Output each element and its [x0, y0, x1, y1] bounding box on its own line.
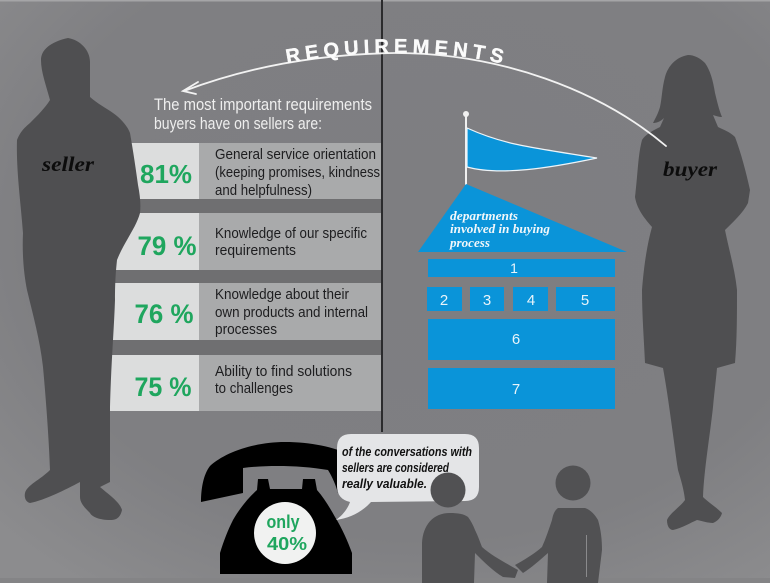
- row 4: 75 %: [134, 372, 192, 402]
- row 2: requirements: [215, 243, 296, 259]
- dial circle: only: [266, 512, 300, 532]
- seller silhouette: [17, 38, 140, 520]
- department 3: 3: [483, 292, 491, 309]
- department 2: 2: [440, 292, 448, 309]
- roof: departments: [450, 208, 518, 223]
- title: REQUIREMENTS: [286, 38, 504, 63]
- label: buyer: buyer: [663, 157, 718, 181]
- label: seller: seller: [41, 152, 95, 176]
- row 4: to challenges: [215, 381, 293, 397]
- department 1: [428, 259, 615, 277]
- department 4: [513, 287, 548, 311]
- row 4: Ability to find solutions: [215, 364, 352, 380]
- callout: sellers are considered: [342, 461, 449, 475]
- row 1: [100, 143, 381, 199]
- row 2: Knowledge of our specific: [215, 226, 367, 242]
- department 2: [427, 287, 462, 311]
- row 1: (keeping promises, kindness: [215, 165, 380, 181]
- department 1: 1: [510, 260, 518, 276]
- building: departments: [418, 184, 627, 409]
- roof: process: [449, 235, 490, 250]
- department 4: 4: [527, 292, 535, 309]
- intro text: The most important requirements: [154, 96, 372, 114]
- buyer silhouette: [635, 55, 750, 530]
- arrow: buyer to seller arc: [183, 53, 666, 146]
- callout: of the conversations with: [342, 445, 472, 459]
- department 6: 6: [512, 331, 520, 348]
- row 1: General service orientation: [215, 147, 376, 163]
- dial circle: 40%: [267, 534, 307, 554]
- department 5: [556, 287, 615, 311]
- department 3: [470, 287, 504, 311]
- callout: really valuable.: [342, 477, 427, 491]
- dial circle: [254, 502, 316, 564]
- roof: involved in buying: [450, 221, 550, 236]
- icon: two people shaking hands: [422, 466, 602, 583]
- intro text: buyers have on sellers are:: [154, 115, 322, 133]
- row 2: 79 %: [138, 231, 196, 261]
- row 1: and helpfulness): [215, 183, 312, 199]
- row 3: [100, 283, 381, 340]
- roof: [418, 184, 627, 252]
- row 3: processes: [215, 322, 277, 338]
- callout: [336, 434, 479, 520]
- row 3: own products and internal: [215, 305, 368, 321]
- row 3: Knowledge about their: [215, 287, 349, 303]
- row 1: 81%: [140, 159, 192, 189]
- icon: flag: [463, 111, 597, 185]
- row 2: [100, 213, 381, 270]
- department 7: 7: [512, 381, 520, 398]
- row 3: 76 %: [134, 299, 194, 329]
- panel: requirements list: [100, 143, 381, 411]
- row 4: [100, 355, 381, 411]
- department 5: 5: [581, 292, 589, 309]
- department 6: [428, 319, 615, 360]
- icon: telephone: [201, 442, 352, 574]
- department 7: [428, 368, 615, 409]
